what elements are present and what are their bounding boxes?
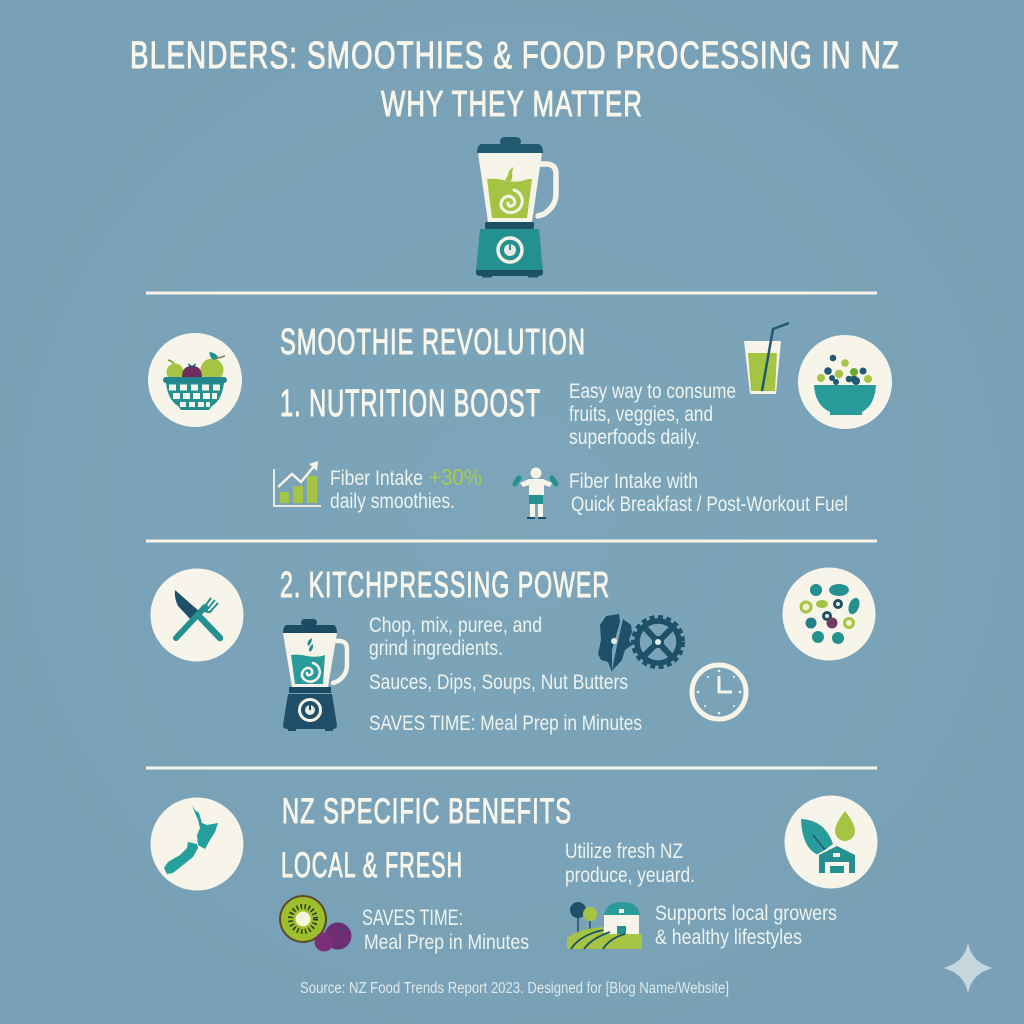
icon: new zealand map	[150, 798, 244, 890]
icon: fruit basket	[148, 333, 242, 427]
text: processing uses: grind ingredients.	[369, 637, 503, 660]
heading: nz specific benefits: NZ SPECIFIC BENEFITS	[282, 792, 572, 831]
text: fiber intake stat: +30%	[429, 464, 482, 490]
panel: smoothie revolution	[148, 321, 892, 519]
icon: main blender	[476, 137, 556, 278]
text: quick breakfast	[569, 470, 848, 516]
text: processing uses: Sauces, Dips, Soups, Nut Butters	[369, 671, 628, 694]
text: easy way to consume: fruits, veggies, and	[569, 403, 713, 426]
text: processing uses: Chop, mix, puree, and	[369, 614, 542, 637]
text: utilize fresh produce: produce, yeuard.	[565, 864, 695, 887]
text: fiber intake stat	[330, 464, 482, 513]
icon: sparkle star	[943, 943, 993, 993]
icon: leaf, drop and barn	[784, 796, 878, 888]
icon: berry bowl	[798, 335, 892, 429]
icon: person with dumbbells	[515, 468, 556, 519]
heading: local and fresh: LOCAL & FRESH	[281, 846, 463, 885]
text: processing uses: SAVES TIME: Meal Prep in Minutes	[369, 712, 642, 735]
icon: smoothie glass	[744, 323, 789, 394]
panel: kitchen processing power	[150, 564, 876, 735]
icon: rising bar chart	[274, 461, 321, 506]
icon: kiwi and berries	[279, 895, 352, 952]
text: easy way to consume: Easy way to consume	[569, 380, 736, 403]
text: saves time	[362, 905, 529, 954]
source line: Source: NZ Food Trends Report 2023. Designed for [Blog Name/Website]	[300, 980, 729, 997]
text: fiber intake stat: daily smoothies.	[330, 490, 455, 513]
text: processing uses	[369, 614, 642, 735]
panel: nz specific benefits	[150, 792, 878, 954]
text: supports local growers: & healthy lifestyles	[655, 926, 802, 949]
title	[130, 35, 900, 124]
icon: gears	[598, 614, 683, 672]
text: supports local growers	[655, 902, 837, 949]
text: supports local growers: Supports local growers	[655, 902, 837, 925]
text: quick breakfast: Quick Breakfast / Post-Workout Fuel	[571, 493, 848, 516]
title: WHY THEY MATTER	[381, 83, 643, 124]
text: quick breakfast: Fiber Intake with	[569, 470, 698, 493]
icon: farm landscape	[567, 902, 642, 949]
text: easy way to consume	[569, 380, 736, 449]
heading: kitchpressing power: 2. KITCHPRESSING POWER	[280, 564, 610, 605]
text: utilize fresh produce: Utilize fresh NZ	[565, 840, 683, 863]
heading: smoothie revolution: SMOOTHIE REVOLUTION	[280, 321, 586, 362]
icon: dark blender	[283, 619, 347, 731]
text: saves time: Meal Prep in Minutes	[364, 931, 529, 954]
text: fiber intake stat: Fiber Intake	[330, 467, 423, 490]
heading: nutrition boost: 1. NUTRITION BOOST	[280, 383, 541, 425]
text: easy way to consume: superfoods daily.	[569, 426, 700, 449]
icon: seeds and nuts	[782, 568, 876, 660]
icon: knife and fork	[150, 568, 244, 662]
text: utilize fresh produce	[565, 840, 695, 887]
icon: clock	[692, 665, 746, 719]
text: saves time: SAVES TIME:	[362, 905, 463, 930]
